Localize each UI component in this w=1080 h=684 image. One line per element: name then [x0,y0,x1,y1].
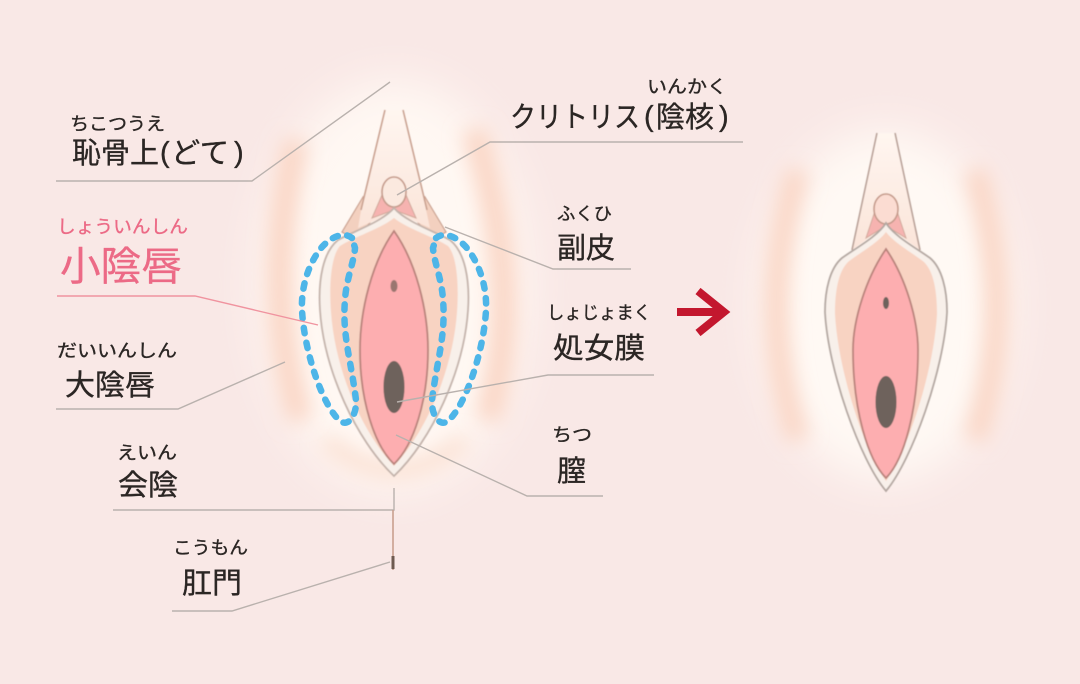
hood [358,110,430,228]
label: clitoris: ( [644,101,654,133]
opening [876,376,896,428]
label: labia minora highlighted: しょういんしん [57,217,188,237]
urethra [390,280,398,292]
label: pubic mound: ) [234,137,244,169]
arrow head [698,291,724,333]
label: accessory skin: 副皮 [557,232,615,265]
diagram: after surgery [825,133,947,491]
label: anus [173,538,248,600]
diagram: before surgery [320,110,468,476]
label: clitoris: いんかく [647,77,727,97]
label: clitoris: ) [719,101,729,133]
label: clitoris: クリトリス [510,102,640,134]
opening [384,361,404,413]
label: labia minora highlighted: 小陰唇 [60,245,182,289]
label: labia majora: だいいんしん [57,341,177,361]
arrow shaft [677,308,720,316]
label: hymen [547,303,651,365]
peach layer [330,218,458,466]
label: pubic mound: ( [160,137,170,169]
label: perineum: えいん [117,443,177,463]
label: anus: 肛門 [182,568,242,600]
label: clitoris: 陰核 [656,101,714,134]
side folds [342,197,446,240]
label: perineum: 会陰 [118,469,178,502]
inner pink [853,249,918,478]
label: labia majora [57,341,177,402]
outer body [320,208,468,476]
label: vagina: ちつ [552,425,592,445]
blue dashed outlines [302,235,486,423]
label: vagina [552,425,592,488]
label: pubic mound: 恥骨上 [72,137,159,170]
label: perineum [117,443,178,502]
pink under clitoris [372,195,416,218]
left excision line [302,235,356,423]
pink under clitoris [866,211,906,238]
label: clitoris [510,77,729,134]
right excision line [432,235,486,423]
label: accessory skin: ふくひ [557,204,612,224]
label: vagina: 膣 [557,455,586,488]
peach layer [835,232,937,481]
label: anus: こうもん [173,538,248,558]
clitoris [382,177,406,207]
label: pubic mound: どて [171,138,229,170]
urethra [883,297,889,309]
label: hymen: しょじょまく [547,303,651,323]
hood outlines [361,110,427,210]
label: pubic mound: ちこつうえ [70,114,165,134]
glow: right figure [761,130,1011,480]
label: hymen: 処女膜 [553,332,645,365]
label: pubic mound [70,114,244,170]
hood outlines [852,133,920,250]
inner pink [360,231,428,464]
glow: left figure [259,80,529,490]
hood [852,133,920,250]
arrow [677,291,724,333]
outer body [825,223,947,491]
label: accessory skin [557,204,615,265]
anus marker [392,510,394,570]
label: labia minora highlighted [57,217,188,289]
anus mark [392,556,394,569]
label: labia majora: 大陰唇 [65,369,155,402]
clitoris [874,194,898,224]
leader lines [56,82,743,611]
